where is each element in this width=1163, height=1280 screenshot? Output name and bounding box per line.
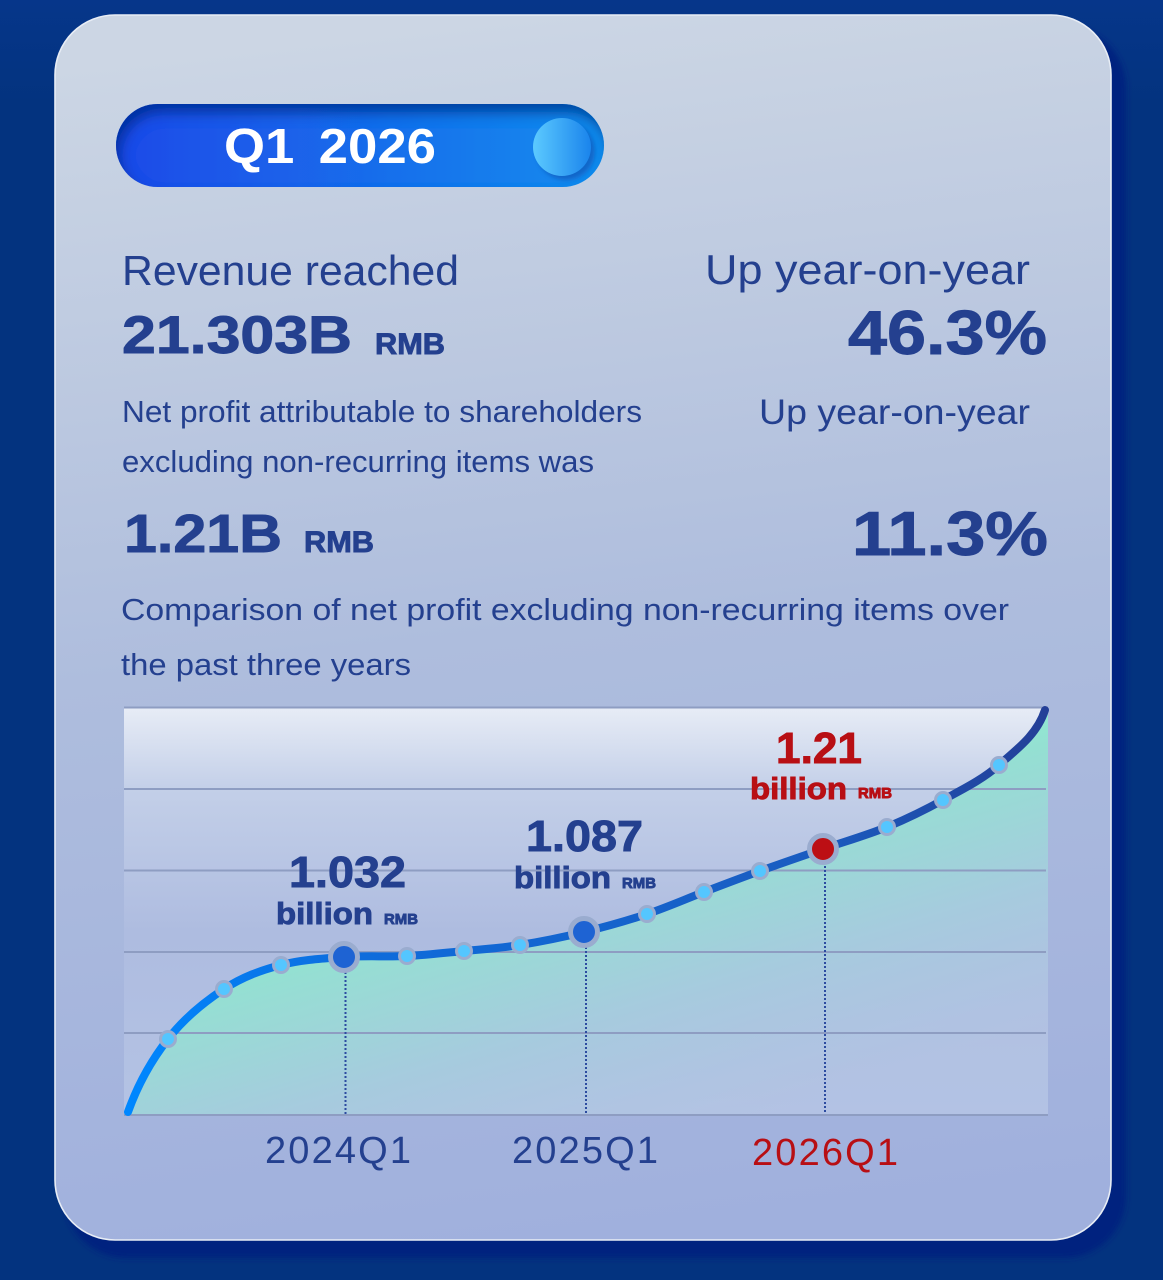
marker 2026Q1 bbox=[810, 836, 836, 862]
revenue unit: RMB bbox=[375, 328, 445, 361]
data label 2026Q1: billion bbox=[750, 771, 847, 806]
trend line bbox=[128, 710, 1045, 1112]
pill label: Q1 2026 bbox=[224, 120, 436, 174]
net profit label: Net profit attributable to shareholders bbox=[122, 394, 642, 429]
data label 2024Q1 bbox=[276, 848, 418, 931]
data label 2024Q1: billion bbox=[276, 896, 373, 931]
data label 2024Q1: RMB bbox=[384, 911, 418, 928]
marker 2024Q1 bbox=[330, 944, 358, 970]
net profit value: 1.21B bbox=[124, 504, 282, 564]
axis label 2026Q1: 2026Q1 bbox=[752, 1132, 898, 1174]
revenue growth label: Up year-on-year bbox=[705, 246, 1030, 293]
small markers bbox=[160, 758, 1006, 1046]
net profit block bbox=[122, 394, 642, 564]
revenue label: Revenue reached bbox=[122, 247, 459, 294]
marker 2025Q1 bbox=[570, 918, 598, 946]
data label 2025Q1: 1.087 bbox=[526, 812, 643, 861]
net profit growth value: 11.3% bbox=[852, 500, 1048, 569]
net profit unit: RMB bbox=[304, 526, 374, 559]
net profit growth label: Up year-on-year bbox=[759, 393, 1030, 432]
area under curve bbox=[128, 712, 1048, 1114]
revenue value: 21.303B bbox=[122, 306, 352, 365]
net profit growth block bbox=[759, 393, 1048, 569]
data label 2025Q1: RMB bbox=[622, 875, 656, 892]
chart heading: Comparison of net profit excluding non-recurring items over bbox=[121, 592, 1009, 627]
drop lines bbox=[346, 862, 825, 1114]
chart heading: the past three years bbox=[121, 647, 411, 682]
data label 2026Q1: RMB bbox=[858, 785, 892, 802]
line chart bbox=[124, 708, 1048, 1174]
data label 2026Q1 bbox=[750, 724, 892, 806]
plot background bbox=[124, 708, 1048, 1115]
data label 2025Q1 bbox=[514, 812, 656, 895]
data label 2026Q1: 1.21 bbox=[776, 724, 862, 773]
net profit label line two: excluding non-recurring items was bbox=[122, 444, 594, 479]
data label 2024Q1: 1.032 bbox=[289, 848, 406, 897]
revenue block bbox=[122, 247, 459, 365]
revenue growth block bbox=[705, 246, 1047, 368]
revenue growth value: 46.3% bbox=[848, 299, 1047, 368]
period pill badge bbox=[116, 104, 604, 187]
pill toggle knob bbox=[533, 118, 595, 180]
chart heading bbox=[121, 592, 1009, 682]
axis label 2024Q1: 2024Q1 bbox=[265, 1130, 411, 1172]
data label 2025Q1: billion bbox=[514, 860, 611, 895]
axis label 2025Q1: 2025Q1 bbox=[512, 1130, 658, 1172]
